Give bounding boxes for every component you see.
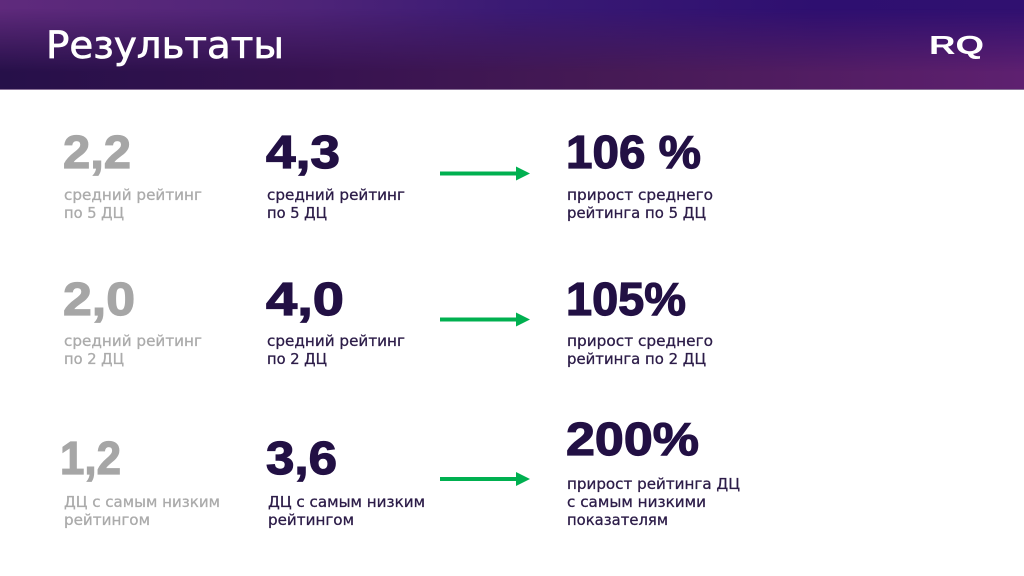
after caption: по 5 ДЦ bbox=[267, 204, 327, 222]
before caption: ДЦ с самым низким bbox=[64, 493, 220, 511]
arrow: green bbox=[440, 166, 530, 180]
after value: 4,0: 4,0 bbox=[266, 273, 344, 325]
row 2: average rating across 2 data centres bbox=[63, 273, 713, 368]
title: Результаты bbox=[46, 24, 284, 67]
growth caption: рейтинга по 5 ДЦ bbox=[567, 204, 706, 222]
row 3: data centre with the lowest rating bbox=[60, 413, 740, 529]
before caption: по 5 ДЦ bbox=[64, 204, 124, 222]
growth caption: рейтинга по 2 ДЦ bbox=[567, 350, 706, 368]
growth caption: с самым низкими bbox=[567, 493, 706, 511]
growth value: 106 %: 106 % bbox=[566, 126, 701, 178]
after caption: рейтингом bbox=[268, 511, 354, 529]
growth caption: показателям bbox=[567, 511, 668, 529]
growth value: 105%: 105% bbox=[566, 273, 686, 325]
header banner bbox=[0, 0, 1024, 90]
logo: RQ: RQ bbox=[929, 30, 984, 60]
after caption: средний рейтинг bbox=[267, 186, 405, 204]
growth caption: прирост рейтинга ДЦ bbox=[567, 475, 740, 493]
arrow: green bbox=[440, 472, 530, 486]
before caption: средний рейтинг bbox=[64, 186, 202, 204]
before value: 2,2: 2,2 bbox=[63, 126, 131, 178]
before caption: рейтингом bbox=[64, 511, 150, 529]
after caption: ДЦ с самым низким bbox=[268, 493, 425, 511]
before caption: средний рейтинг bbox=[64, 332, 202, 350]
after value: 4,3: 4,3 bbox=[266, 126, 340, 178]
before caption: по 2 ДЦ bbox=[64, 350, 124, 368]
before value: 2,0: 2,0 bbox=[63, 273, 135, 325]
after caption: средний рейтинг bbox=[267, 332, 405, 350]
growth caption: прирост среднего bbox=[567, 332, 713, 350]
after value: 3,6: 3,6 bbox=[266, 432, 337, 484]
row 1: average rating across 5 data centres bbox=[63, 126, 713, 222]
growth caption: прирост среднего bbox=[567, 186, 713, 204]
before value: 1,2: 1,2 bbox=[60, 432, 121, 484]
after caption: по 2 ДЦ bbox=[267, 350, 327, 368]
growth value: 200%: 200% bbox=[566, 413, 699, 465]
arrow: green bbox=[440, 312, 530, 326]
